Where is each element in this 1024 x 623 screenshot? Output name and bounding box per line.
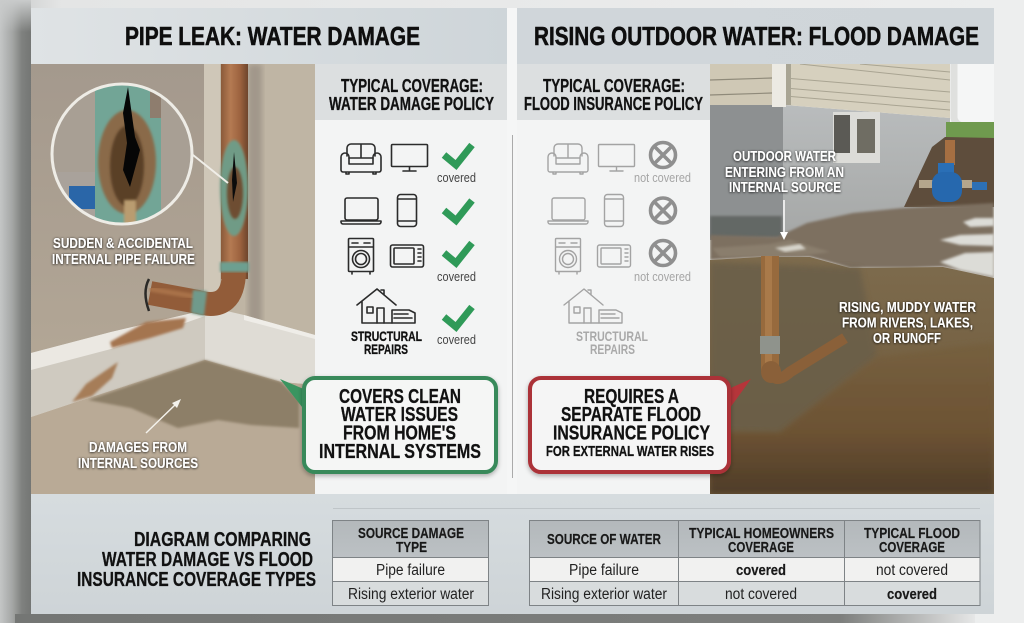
callout: covers clean water: WATER ISSUES <box>341 403 458 426</box>
label: rising muddy water: OR RUNOFF <box>873 331 941 347</box>
downspout <box>954 64 962 126</box>
icon: washer muted <box>556 238 580 274</box>
icon: washer <box>348 238 374 274</box>
diagram title: DIAGRAM COMPARING <box>134 528 311 551</box>
icon: laptop muted <box>548 198 588 224</box>
icon: check <box>444 243 472 263</box>
label: rising muddy water: FROM RIVERS, LAKES, <box>842 316 973 332</box>
table: coverage comparison: SOURCE OF WATER <box>547 532 661 548</box>
not covered label: not covered <box>634 170 691 185</box>
icon: house muted <box>564 289 622 323</box>
water puddle <box>88 360 299 428</box>
callout: covers clean water: INTERNAL SYSTEMS <box>319 440 481 463</box>
covered label: covered <box>437 332 476 347</box>
label: sudden and accidental: SUDDEN & ACCIDENTAL <box>53 236 193 252</box>
label: structural repairs muted <box>576 328 648 357</box>
coverage heading: TYPICAL COVERAGE: <box>543 76 685 96</box>
covered label: covered <box>437 170 476 185</box>
table: coverage comparison: Rising exterior water <box>541 586 667 603</box>
callout: covers clean water: COVERS CLEAN <box>339 385 461 408</box>
covered label: covered <box>437 269 476 284</box>
icon: sofa <box>341 144 381 174</box>
panel: flood coverage <box>512 64 710 494</box>
callout: covers clean water: FROM HOME'S <box>343 422 456 444</box>
left baseboard <box>31 310 205 417</box>
icon: sofa muted <box>548 144 588 174</box>
coverage heading <box>517 64 710 120</box>
header: flood damage <box>517 8 994 64</box>
coverage heading <box>315 64 507 120</box>
header: pipe leak <box>31 8 507 64</box>
arrow: down to water <box>780 200 788 240</box>
table: coverage comparison: COVERAGE <box>728 540 794 556</box>
table: coverage comparison <box>529 520 980 606</box>
callout: requires flood policy: REQUIRES A <box>584 385 679 408</box>
callout: requires flood policy: SEPARATE FLOOD <box>561 403 701 426</box>
callout: requires flood policy: INSURANCE POLICY <box>553 422 710 444</box>
dirt bank <box>904 137 994 207</box>
diagram title: WATER DAMAGE VS FLOOD <box>102 548 313 571</box>
bottom strip <box>31 494 994 614</box>
label: structural repairs: STRUCTURAL <box>351 328 422 344</box>
icon: phone muted <box>604 194 624 226</box>
zoom connector line <box>193 155 228 183</box>
submerged pipe <box>760 256 845 383</box>
blue valve <box>919 140 987 202</box>
table: coverage comparison: Pipe failure <box>569 562 639 579</box>
icon: laptop <box>341 198 381 224</box>
label: damages from internal sources <box>78 440 198 472</box>
icon: microwave <box>390 245 424 267</box>
background shadow: bottom edge <box>15 614 975 623</box>
table: coverage comparison: covered <box>887 586 937 603</box>
table: source damage type: SOURCE DAMAGE <box>358 526 464 542</box>
diagram title <box>77 528 316 591</box>
icon: tv <box>392 144 428 171</box>
table: coverage comparison: TYPICAL FLOOD <box>864 526 960 542</box>
label: outdoor water <box>725 149 844 196</box>
callout: requires flood policy <box>530 378 751 472</box>
concrete foundation <box>783 105 950 234</box>
label: structural repairs: REPAIRS <box>364 341 408 357</box>
callout: requires flood policy: FOR EXTERNAL WATER RISES <box>546 443 714 460</box>
table: source damage type: Rising exterior water <box>348 586 474 603</box>
table: source damage type: TYPE <box>396 540 427 556</box>
icon: x circle <box>650 142 676 168</box>
magnifier circle <box>52 84 192 232</box>
carpet <box>31 360 315 494</box>
icon: check <box>444 200 472 220</box>
callout: covers clean water <box>280 378 496 472</box>
arrow: to puddle <box>146 399 181 433</box>
submerged foundation wall <box>710 262 877 433</box>
label: structural repairs muted: STRUCTURAL <box>576 328 648 344</box>
siding <box>710 64 772 105</box>
icon: check <box>444 307 472 327</box>
label: rising muddy water: RISING, MUDDY WATER <box>839 300 976 316</box>
icon: microwave muted <box>598 245 630 267</box>
label: damages from internal sources: INTERNAL SOURCES <box>78 456 198 472</box>
icon: x circle <box>650 198 676 223</box>
table: coverage comparison: TYPICAL HOMEOWNERS <box>689 526 834 542</box>
icon: tv muted <box>598 144 634 171</box>
muddy ground <box>710 342 994 494</box>
label: rising muddy water <box>839 300 976 347</box>
diagram title: INSURANCE COVERAGE TYPES <box>77 568 316 591</box>
label: outdoor water: INTERNAL SOURCE <box>729 180 841 196</box>
table: source damage type <box>332 520 489 606</box>
coverage heading: FLOOD INSURANCE POLICY <box>524 94 703 114</box>
background shadow: left edge <box>0 0 31 623</box>
label: sudden and accidental <box>52 236 195 268</box>
photo panel: leaking pipe <box>31 64 315 494</box>
coverage heading: WATER DAMAGE POLICY <box>329 94 494 114</box>
underwater section <box>710 257 994 494</box>
photo panel: flood <box>710 64 994 494</box>
label: sudden and accidental: INTERNAL PIPE FAILURE <box>52 252 195 268</box>
label: structural repairs muted: REPAIRS <box>590 341 635 357</box>
background shadow: top fade <box>0 0 31 32</box>
table: source damage type: Pipe failure <box>376 562 445 579</box>
label: outdoor water: OUTDOOR WATER <box>733 149 836 165</box>
icon: check <box>444 145 472 165</box>
icon: x circle <box>650 240 676 266</box>
not covered label: not covered <box>634 269 691 284</box>
grass <box>946 122 994 138</box>
panel: water damage coverage <box>315 64 507 494</box>
table: coverage comparison: covered <box>736 562 786 579</box>
table: coverage comparison: not covered <box>876 562 948 579</box>
table: coverage comparison: COVERAGE <box>879 540 945 556</box>
table: coverage comparison: not covered <box>725 586 797 603</box>
title: pipe leak water damage: PIPE LEAK: WATER DAMAGE <box>125 23 420 51</box>
label: outdoor water: ENTERING FROM AN <box>725 165 844 181</box>
flood surface <box>710 203 994 278</box>
window <box>833 112 880 163</box>
coverage heading: TYPICAL COVERAGE: <box>341 76 483 96</box>
icon: phone <box>398 194 416 226</box>
right baseboard <box>205 306 315 385</box>
icon: house <box>357 289 415 323</box>
label: damages from internal sources: DAMAGES FROM <box>89 440 187 456</box>
label: structural repairs <box>351 328 422 357</box>
pipe <box>221 64 248 279</box>
